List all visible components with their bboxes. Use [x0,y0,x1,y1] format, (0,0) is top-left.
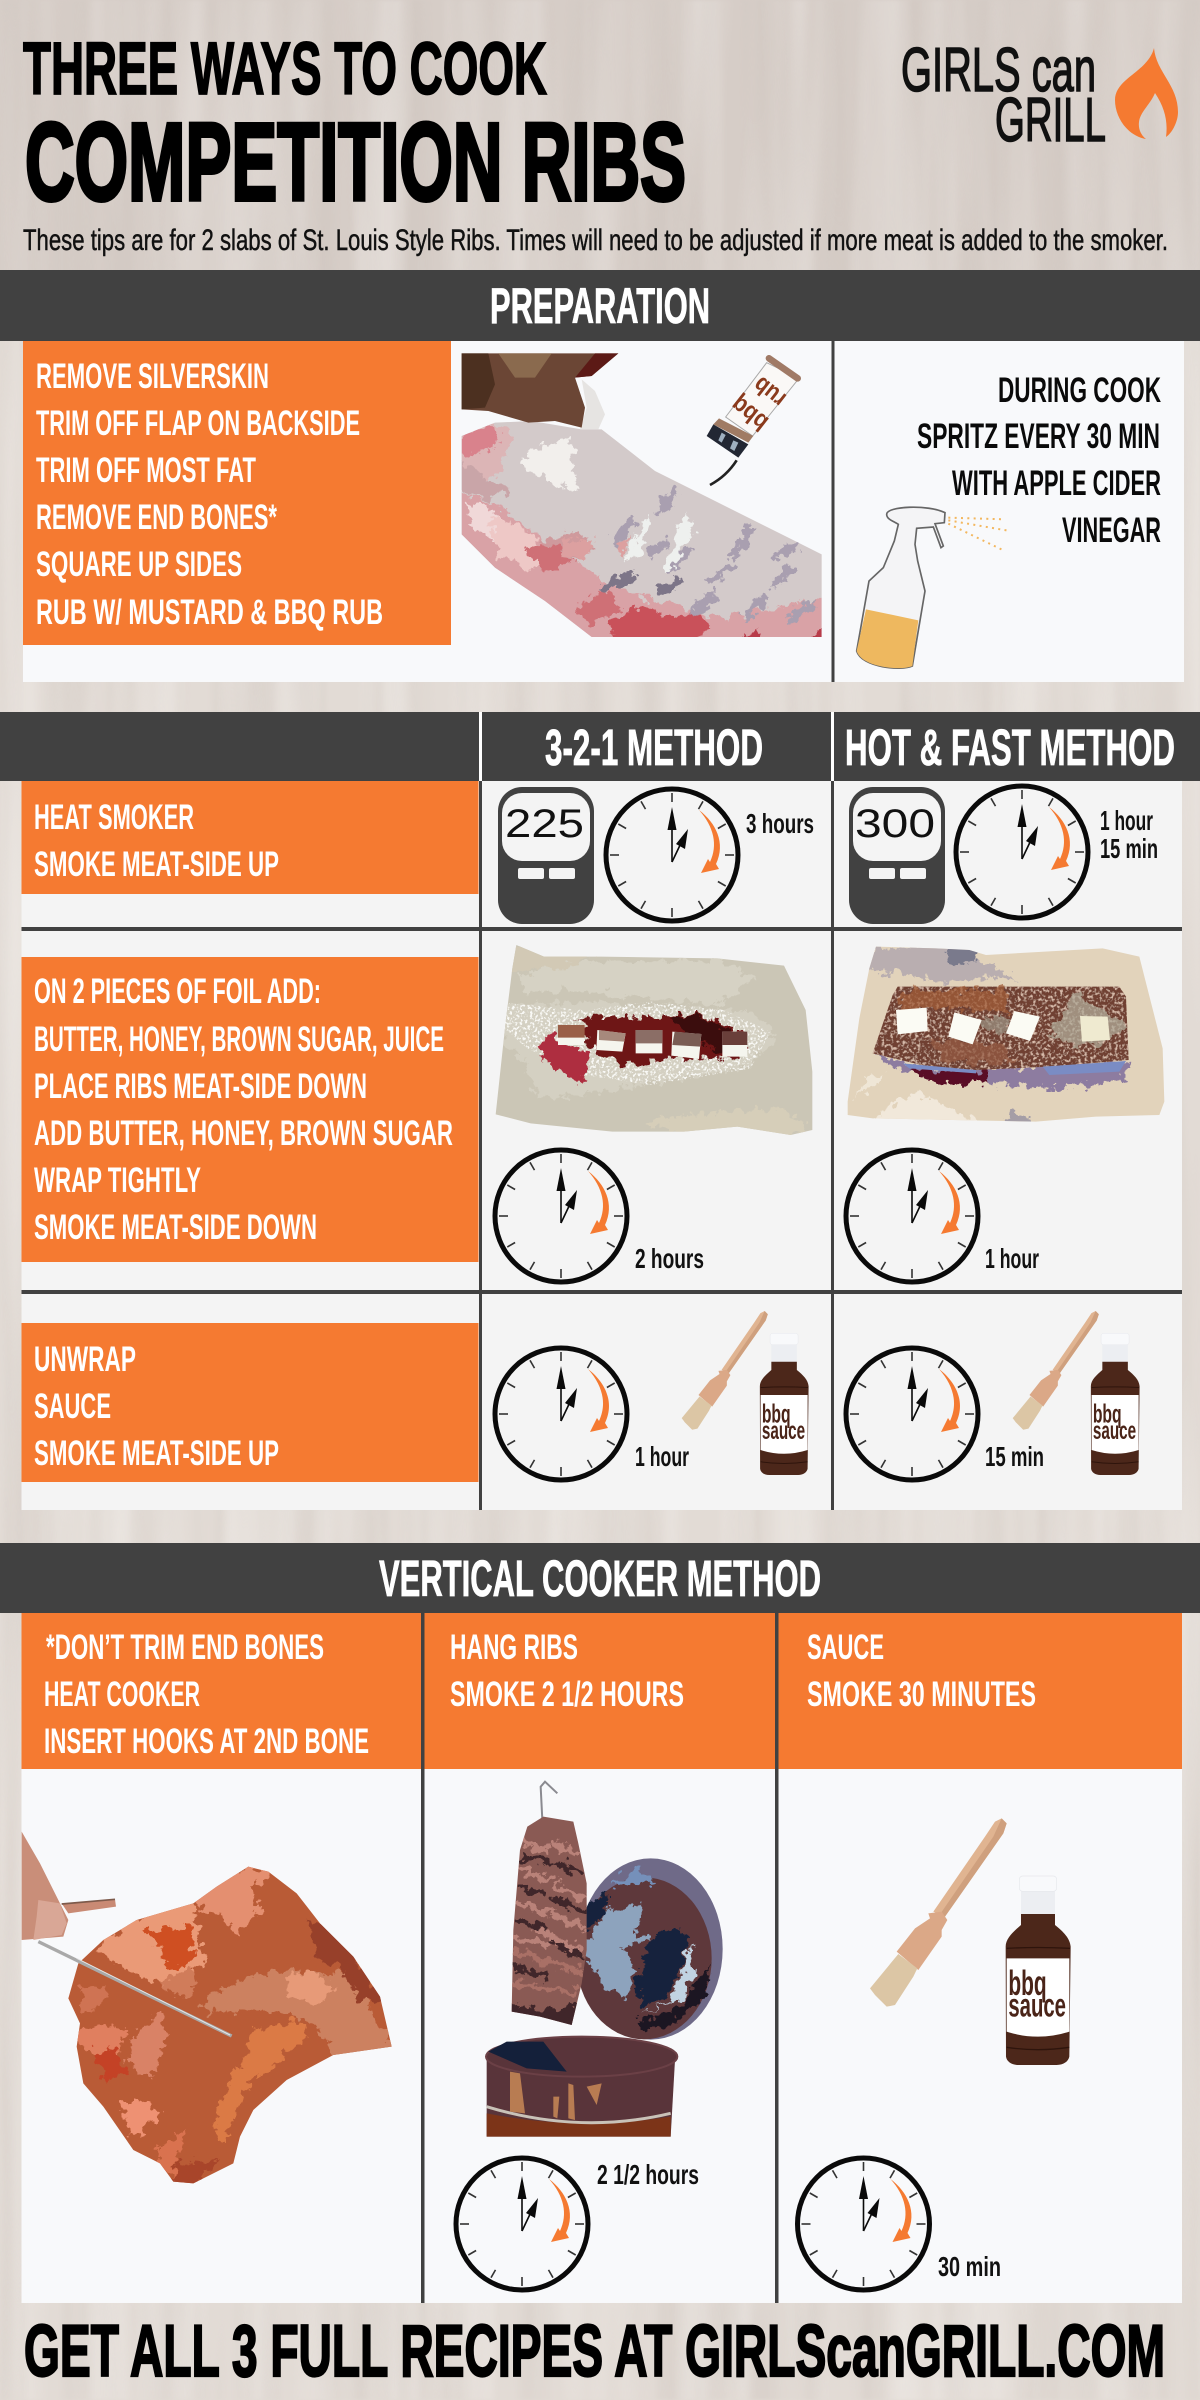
label: 1 hour 15 min: 1 hour [1100,805,1153,836]
icon: thermometer 225 [498,787,594,924]
step: foil wrap: ADD BUTTER, HONEY, BROWN SUGAR [34,1114,453,1153]
heading: 3-2-1 method: 3-2-1 METHOD [545,719,763,776]
step: trim and hooks: INSERT HOOKS AT 2ND BONE [44,1722,369,1761]
icon: bbq sauce bottle, large: bbq [1008,1964,1047,2003]
illustration: trimming ribs with gloved hand [455,353,832,648]
title [23,27,686,224]
preparation steps: RUB W/ MUSTARD & BBQ RUB [36,593,383,632]
icon: thermometer 225: 225 [505,802,584,846]
icon: clock 1 hour, sauce step [495,1348,627,1480]
label: 1 hour: 1 hour [985,1243,1039,1274]
step: trim and hooks: HEAT COOKER [44,1675,200,1714]
step: foil wrap: SMOKE MEAT-SIDE DOWN [34,1208,317,1247]
heading: vertical cooker method: VERTICAL COOKER METHOD [379,1550,821,1607]
icon: clock 2 hours [495,1150,627,1282]
label: 1 hour 15 min: 15 min [1100,833,1158,864]
icon: clock 2 1/2 hours [456,2158,588,2290]
heading: Preparation: PREPARATION [490,278,710,334]
step: trim and hooks [44,1628,369,1761]
step: foil wrap: BUTTER, HONEY, BROWN SUGAR, JUICE [34,1020,444,1059]
step: unwrap and sauce [22,1323,478,1482]
icon: basting brush, second [1013,1311,1099,1430]
label: 3 hours: 3 hours [746,808,814,839]
preparation steps: TRIM OFF MOST FAT [36,451,256,490]
panel: methods table [22,781,1182,1510]
label: 15 min: 15 min [985,1441,1044,1472]
label: 1 hour, sauce step: 1 hour [635,1441,689,1472]
label: 2 hours: 2 hours [635,1243,704,1274]
step: foil wrap: WRAP TIGHTLY [34,1161,201,1200]
icon: thermometer 300 [849,787,945,924]
step: sauce [807,1628,1036,1714]
step: heat smoker: SMOKE MEAT-SIDE UP [34,845,279,884]
step: unwrap and sauce: UNWRAP [34,1340,136,1379]
section bar: Preparation [0,270,1200,341]
step: foil wrap: PLACE RIBS MEAT-SIDE DOWN [34,1067,367,1106]
icon: clock 15 min [846,1348,978,1480]
illustration: foil with ribs and butter [848,945,1164,1125]
preparation steps: TRIM OFF FLAP ON BACKSIDE [36,404,360,443]
step: heat smoker [22,781,478,894]
icon: bbq sauce bottle: sauce [762,1417,805,1445]
panel: preparation [23,341,1184,682]
step: sauce: SMOKE 30 MINUTES [807,1675,1036,1714]
icon: bbq sauce bottle: bbq [762,1399,791,1429]
illustration: foil with butter and honey [496,942,817,1138]
step: foil wrap [22,957,478,1262]
title line 2: COMPETITION RIBS [25,101,686,224]
preparation steps: SQUARE UP SIDES [36,545,242,584]
step: unwrap and sauce: SMOKE MEAT-SIDE UP [34,1434,279,1473]
icon: clock 1 hour [846,1150,978,1282]
icon: bbq sauce bottle, second: sauce [1093,1417,1136,1445]
icon: thermometer 300: 300 [855,802,935,846]
illustration: trimming ribs with gloved hand: rub [748,371,791,413]
logo line 2: GRILL [995,86,1106,155]
step: hang ribs [450,1628,684,1714]
icon: bbq sauce bottle, second: bbq [1093,1399,1122,1429]
step: foil wrap: ON 2 PIECES OF FOIL ADD: [34,972,321,1011]
label: 2 1/2 hours: 2 1/2 hours [597,2159,699,2190]
section bar: vertical cooker method [0,1543,1200,1613]
illustration: trimming ribs with gloved hand: bbq [726,390,774,436]
icon: bbq sauce bottle, large [1006,1876,1071,2065]
label: 30 min: 30 min [938,2251,1001,2282]
step: sauce: SAUCE [807,1628,884,1667]
step: heat smoker: HEAT SMOKER [34,798,194,837]
preparation steps [23,341,451,645]
icon: bbq sauce bottle [760,1333,809,1475]
panel: vertical cooker [22,1613,1182,2303]
step: unwrap and sauce: SAUCE [34,1387,111,1426]
icon: clock 3 hours [606,789,738,921]
icon: bbq sauce bottle, second [1091,1333,1140,1475]
step: hang ribs: SMOKE 2 1/2 HOURS [450,1675,684,1714]
icon: basting brush, large [870,1818,1007,2007]
preparation steps: REMOVE END BONES* [36,498,277,537]
icon: bbq sauce bottle, large: sauce [1008,1988,1066,2025]
shaker [726,363,799,436]
title line 1: THREE WAYS TO COOK [23,27,547,110]
icon: flame [1115,48,1178,139]
icon: spray bottle [857,507,1010,668]
methods header bar [0,712,1200,781]
step: hang ribs: HANG RIBS [450,1628,578,1667]
callout: during cook [917,371,1161,550]
icon: clock 30 min [798,2158,930,2290]
logo line 1: GIRLS can [901,36,1096,105]
preparation steps: REMOVE SILVERSKIN [36,357,269,396]
icon: clock 1 hour 15 min [956,786,1088,918]
illustration: raw ribs with hook [22,1832,397,2190]
icon: basting brush [682,1311,768,1430]
step: trim and hooks: *DON’T TRIM END BONES [46,1628,324,1667]
illustration: hanging ribs and drum smoker [486,1782,723,2137]
logo: Girls can Grill [901,36,1178,155]
label: 1 hour 15 min [1100,805,1158,864]
